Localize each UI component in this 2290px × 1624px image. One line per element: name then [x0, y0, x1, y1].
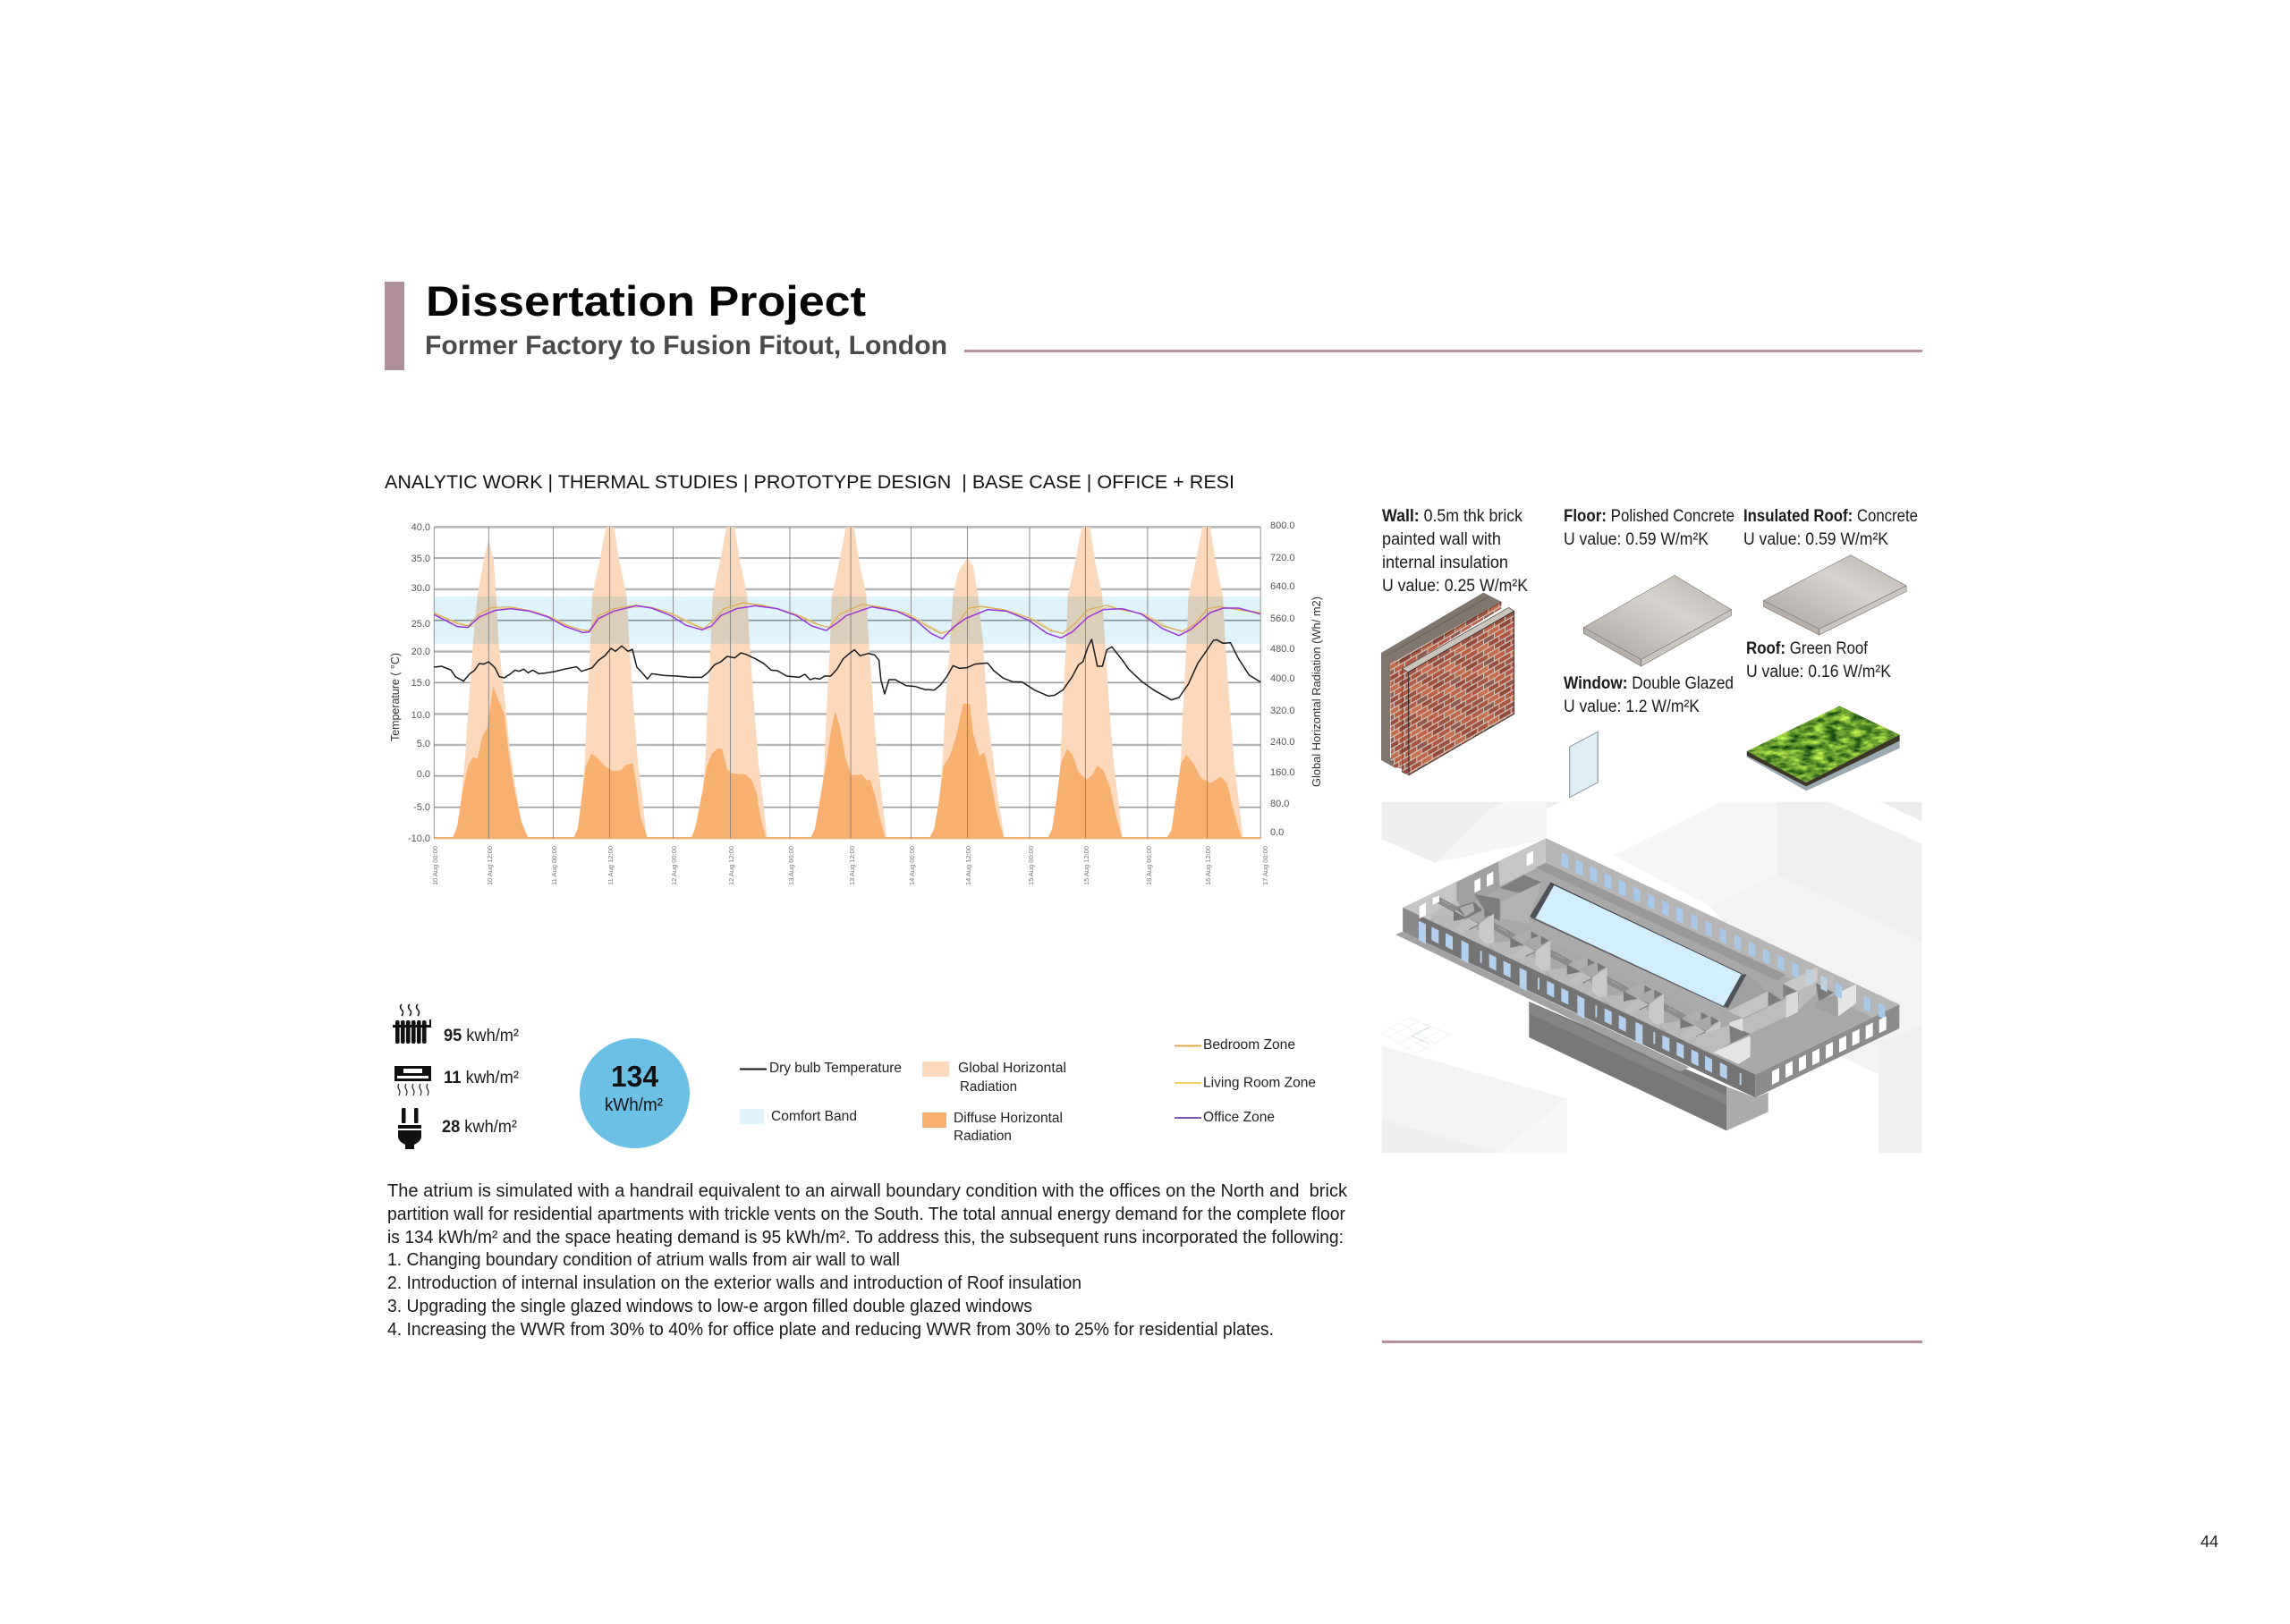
right axis labels: 240.0 — [1270, 737, 1295, 748]
label: cooling demand: 11 kwh/m² — [444, 1069, 519, 1087]
ground grid — [1382, 1018, 1450, 1053]
right axis labels: 0.0 — [1270, 827, 1284, 838]
material label: insulated roof: U value: 0.59 W/m²K — [1743, 530, 1888, 549]
x axis date labels: 12 Aug 00:00 — [670, 846, 678, 885]
legend: diffuse radiation — [922, 1111, 1063, 1144]
chart: temperature and radiation time series — [388, 520, 1323, 885]
chart plot area — [433, 526, 1261, 839]
ledge — [1395, 932, 1689, 1071]
page number: 44 — [2201, 1533, 2218, 1551]
left axis labels: 30.0 — [411, 583, 430, 594]
atrium band — [1528, 917, 1724, 1024]
material label: wall: Wall: 0.5m thk brick — [1382, 507, 1522, 526]
right axis labels: 480.0 — [1270, 644, 1295, 655]
legend: global radiation — [922, 1061, 1066, 1095]
diffuse horizontal radiation — [434, 686, 1260, 839]
right axis labels — [1270, 520, 1295, 838]
left axis labels: 5.0 — [417, 739, 430, 749]
material label: wall: U value: 0.25 W/m²K — [1382, 577, 1528, 596]
left end rooms — [1501, 883, 1541, 924]
title: Dissertation Project — [426, 277, 866, 325]
end rooms — [1697, 968, 1856, 1064]
x axis date labels: 11 Aug 00:00 — [550, 846, 558, 885]
lower block — [1529, 1002, 1768, 1130]
window sample — [1570, 732, 1598, 798]
material label: green roof: Roof: Green Roof — [1746, 639, 1869, 658]
description text block: partition wall for residential apartments with trickle vents on the South. The total annual energy demand for the complete floor — [387, 1205, 1345, 1224]
left axis title: Temperature ( °C) — [388, 653, 402, 741]
material label: floor — [1564, 507, 1734, 549]
legend: diffuse radiation: Radiation — [954, 1129, 1012, 1144]
header rule — [964, 350, 1922, 352]
rear and left wall windows — [1420, 851, 1885, 1019]
legend: living room zone: Living Room Zone — [1203, 1075, 1316, 1091]
left wall — [1403, 838, 1546, 933]
chart legend — [740, 1037, 1316, 1144]
floor slab sample — [1583, 575, 1731, 666]
right axis labels: 560.0 — [1270, 613, 1295, 624]
x axis date labels: 14 Aug 12:00 — [964, 846, 972, 885]
rear wall — [1546, 838, 1899, 1019]
line: dry bulb temperature — [434, 639, 1260, 700]
right axis labels: 720.0 — [1270, 553, 1295, 563]
atrium skylight — [1536, 885, 1742, 1006]
corridor strip — [1536, 863, 1786, 981]
material label: window: Window: Double Glazed — [1564, 674, 1734, 693]
x axis date labels: 14 Aug 00:00 — [908, 846, 916, 885]
material label: window — [1564, 674, 1734, 716]
x axis date labels: 16 Aug 00:00 — [1145, 846, 1153, 885]
left axis labels: 35.0 — [411, 554, 430, 564]
side wall windows — [1772, 1016, 1887, 1085]
atrium frame — [1530, 883, 1747, 1008]
front wall — [1403, 908, 1755, 1097]
left axis labels: -5.0 — [413, 802, 430, 813]
x axis date labels: 17 Aug 00:00 — [1261, 846, 1269, 885]
description text block: 4. Increasing the WWR from 30% to 40% for office plate and reducing WWR from 30% to 25% for residential plates. — [387, 1320, 1274, 1340]
description text block: 1. Changing boundary condition of atrium walls from air wall to wall — [387, 1250, 900, 1270]
left axis labels: 10.0 — [411, 710, 430, 721]
bottom rule — [1382, 1341, 1922, 1343]
right axis labels: 640.0 — [1270, 581, 1295, 592]
material label: insulated roof — [1743, 507, 1918, 549]
x axis date labels: 16 Aug 12:00 — [1204, 846, 1212, 885]
description text block: is 134 kWh/m² and the space heating demand is 95 kWh/m². To address this, the subsequent runs incorporated the following: — [387, 1228, 1344, 1248]
material label: wall: painted wall with — [1382, 530, 1501, 549]
isometric building model — [1395, 838, 1900, 1130]
right axis labels: 400.0 — [1270, 673, 1295, 684]
right axis labels: 320.0 — [1270, 706, 1295, 716]
legend: global radiation: Global Horizontal — [958, 1061, 1066, 1076]
description text block: 2. Introduction of internal insulation on the exterior walls and introduction of Roof insulation — [387, 1273, 1081, 1293]
legend: office zone: Office Zone — [1203, 1110, 1275, 1125]
title block — [385, 277, 1922, 370]
x axis date labels: 10 Aug 12:00 — [486, 846, 494, 885]
green roof sample — [1747, 706, 1900, 791]
right axis labels: 160.0 — [1270, 767, 1295, 778]
left axis labels: 20.0 — [411, 647, 430, 657]
legend: dry bulb: Dry bulb Temperature — [769, 1061, 902, 1076]
right axis labels: 800.0 — [1270, 520, 1295, 531]
x axis date labels: 13 Aug 00:00 — [787, 846, 795, 885]
comfort band — [434, 596, 1260, 644]
material label: window: U value: 1.2 W/m²K — [1564, 698, 1700, 716]
material label: insulated roof: Insulated Roof: Concrete — [1743, 507, 1918, 526]
section heading: ANALYTIC WORK | THERMAL STUDIES | PROTOTYPE DESIGN | BASE CASE | OFFICE + RESI — [385, 472, 1234, 493]
legend: global radiation: Radiation — [960, 1079, 1017, 1095]
line: living room zone — [434, 604, 1260, 635]
energy breakdown — [393, 1004, 690, 1149]
total energy circle: kWh/m² — [605, 1095, 663, 1115]
line: bedroom zone — [434, 603, 1260, 633]
right axis title: Global Horizontal Radiation (Wh/ m2) — [1310, 596, 1323, 787]
materials illustrations — [1569, 554, 1907, 798]
icon: radiator heating — [393, 1004, 431, 1044]
front wall windows — [1419, 921, 1742, 1085]
label: equipment demand: 28 kwh/m² — [442, 1118, 517, 1137]
x axis date labels: 13 Aug 12:00 — [848, 846, 856, 885]
left axis labels: 15.0 — [411, 678, 430, 689]
description text block: 3. Upgrading the single glazed windows to low-e argon filled double glazed windows — [387, 1297, 1032, 1316]
x axis date labels: 11 Aug 12:00 — [606, 846, 615, 885]
line: office zone — [434, 605, 1260, 639]
room modules — [1431, 896, 1494, 948]
icon: air conditioning — [394, 1066, 431, 1095]
legend: bedroom zone: Bedroom Zone — [1203, 1037, 1295, 1053]
legend: diffuse radiation: Diffuse Horizontal — [954, 1111, 1063, 1126]
material label: green roof — [1746, 639, 1891, 681]
subtitle: Former Factory to Fusion Fitout, London — [425, 331, 947, 360]
left axis labels: -10.0 — [408, 833, 430, 844]
total energy circle: 134 — [611, 1060, 659, 1093]
legend: comfort band: Comfort Band — [771, 1109, 857, 1124]
material label: floor: U value: 0.59 W/m²K — [1564, 530, 1709, 549]
floor plate — [1403, 838, 1899, 1097]
left axis labels: 0.0 — [417, 769, 430, 780]
right axis labels: 80.0 — [1270, 799, 1289, 809]
insulated roof sample — [1763, 555, 1906, 635]
material label: wall — [1382, 507, 1528, 596]
total energy circle — [580, 1038, 690, 1148]
right wall — [1755, 1004, 1899, 1097]
x axis date labels: 15 Aug 12:00 — [1082, 846, 1090, 885]
left axis labels: 40.0 — [411, 522, 430, 533]
icon: electric plug — [398, 1108, 421, 1149]
material label: green roof: U value: 0.16 W/m²K — [1746, 663, 1891, 681]
heading accent bar — [385, 282, 404, 370]
material label: floor: Floor: Polished Concrete — [1564, 507, 1734, 526]
isometric building background — [1381, 801, 1921, 1153]
description text block — [387, 1181, 1348, 1340]
wall sample — [1381, 592, 1515, 776]
x axis date labels — [431, 846, 1269, 885]
x axis date labels: 15 Aug 00:00 — [1027, 846, 1035, 885]
x axis date labels: 10 Aug 00:00 — [431, 846, 439, 885]
x axis date labels: 12 Aug 12:00 — [727, 846, 735, 885]
global horizontal radiation — [453, 527, 1243, 838]
left axis labels: 25.0 — [411, 619, 430, 630]
material label: wall: internal insulation — [1382, 554, 1508, 572]
left axis labels — [408, 522, 430, 844]
description text block: The atrium is simulated with a handrail equivalent to an airwall boundary condition with the offices on the North and brick — [387, 1181, 1348, 1201]
label: heating demand: 95 kwh/m² — [444, 1027, 519, 1045]
